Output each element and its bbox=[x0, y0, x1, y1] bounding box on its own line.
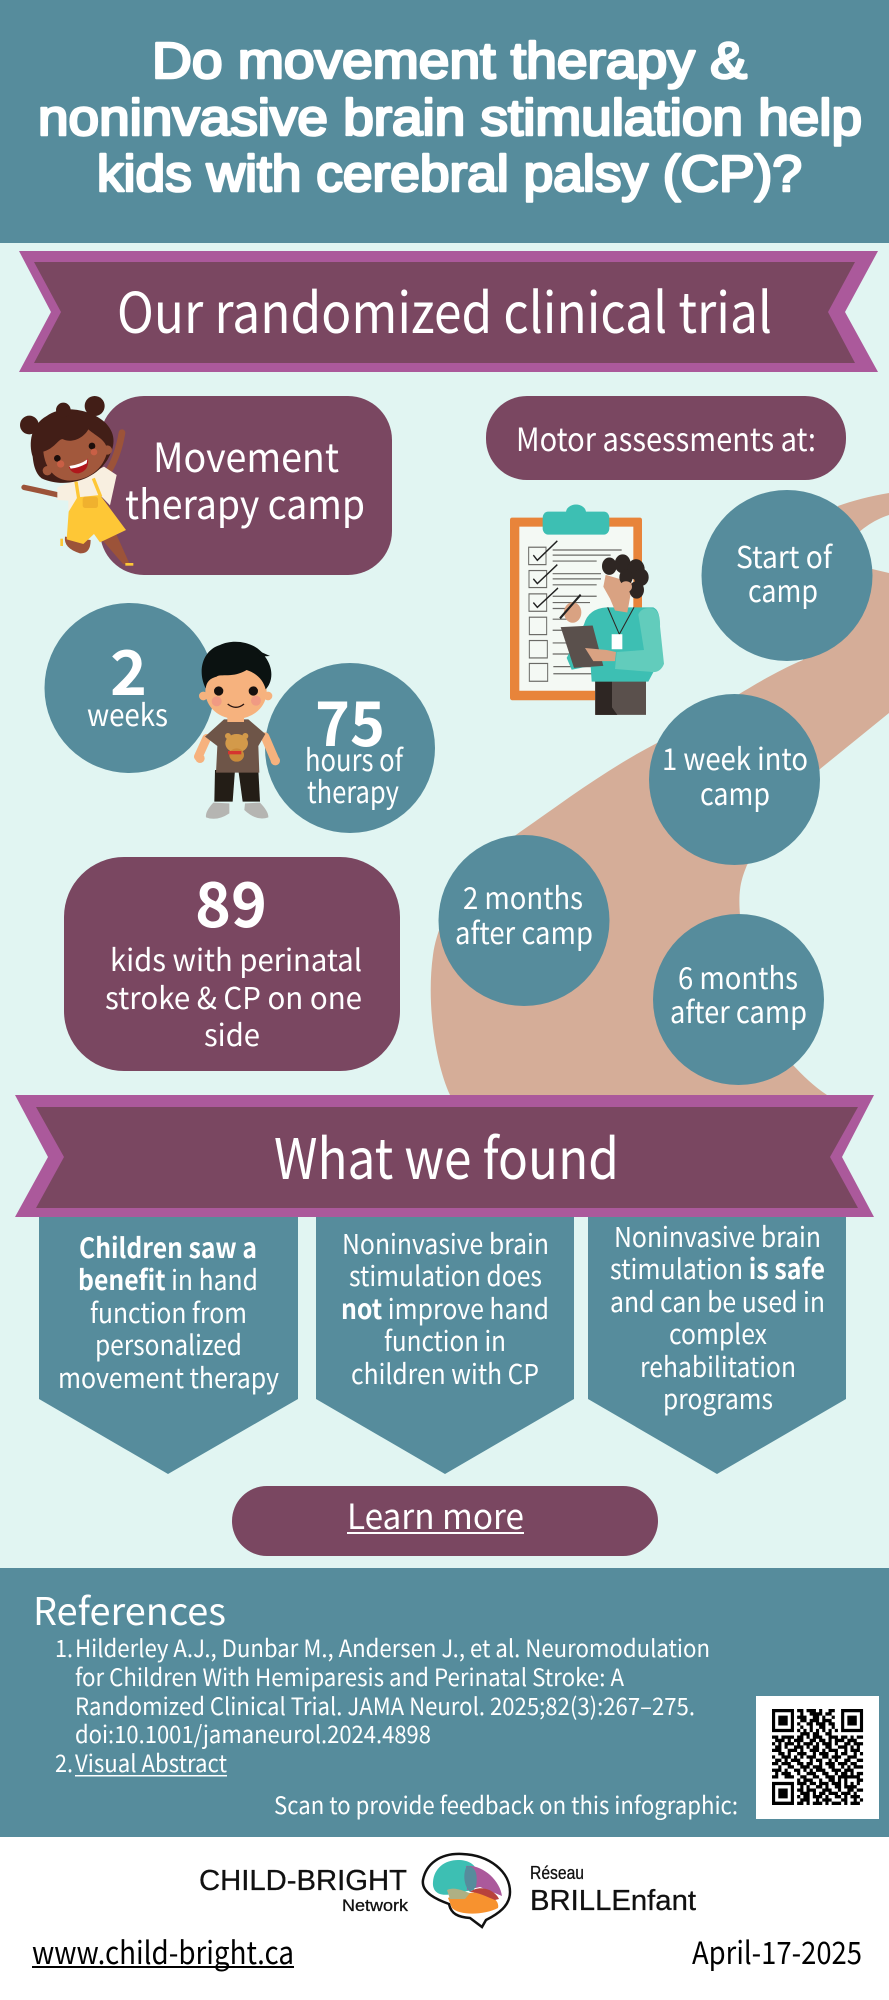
header band with title: Do movement therapy & bbox=[152, 32, 747, 89]
section ribbon: our randomized clinical trial bbox=[19, 251, 878, 372]
icon: clinician with clipboard bbox=[510, 505, 664, 715]
panel: 89 kids bbox=[64, 855, 400, 1071]
finding card: safe: rehabilitation bbox=[640, 1345, 796, 1385]
stat circle: 75 hours of therapy: therapy bbox=[307, 768, 399, 812]
finding card: safe: complex bbox=[669, 1312, 767, 1352]
assessment circle: 6 months after camp bbox=[653, 914, 824, 1085]
finding card: benefit: personalized bbox=[95, 1323, 242, 1363]
winding path behind assessment circles bbox=[431, 493, 889, 1095]
date: April-17-2025 bbox=[692, 1928, 862, 1973]
panel: movement therapy camp: Movement bbox=[153, 426, 339, 484]
assessment circle: start of camp: camp bbox=[748, 567, 818, 611]
panel: references: for Children With Hemiparesis and Perinatal Stroke: A bbox=[75, 1658, 624, 1693]
panel: 89 kids: 89 bbox=[195, 855, 267, 945]
panel: motor assessments heading: Motor assessments at: bbox=[516, 415, 816, 461]
header band with title bbox=[0, 0, 889, 243]
finding card: no improvement: children with CP bbox=[351, 1352, 539, 1392]
logo: Réseau BRILLEnfant: Réseau bbox=[530, 1863, 584, 1883]
logo: CHILD-BRIGHT Network: Network bbox=[342, 1896, 409, 1915]
header band with title: kids with cerebral palsy (CP)? bbox=[97, 145, 802, 202]
stat circle: 75 hours of therapy: 75 bbox=[315, 674, 385, 764]
finding card: benefit: movement therapy bbox=[58, 1356, 279, 1396]
finding card: benefit: Children saw a bbox=[79, 1226, 257, 1266]
icon: standing boy bbox=[195, 642, 280, 819]
finding card: safe bbox=[588, 1210, 846, 1474]
panel: references: Hilderley A.J., Dunbar M., Andersen J., et al. Neuromodulation bbox=[75, 1629, 710, 1664]
button: learn more: Learn more bbox=[347, 1489, 524, 1540]
panel: references: doi:10.1001/jamaneurol.2024.4898 bbox=[75, 1715, 431, 1750]
panel: references: 1. bbox=[55, 1629, 73, 1664]
section ribbon: our randomized clinical trial: Our randomized clinical trial bbox=[117, 269, 772, 350]
assessment circle: 6 months after camp: 6 months bbox=[678, 954, 798, 998]
section ribbon: what we found bbox=[15, 1095, 874, 1217]
panel: 89 kids: stroke & CP on one bbox=[105, 974, 362, 1018]
finding card: no improvement: function in bbox=[384, 1319, 506, 1359]
finding card: benefit: function from bbox=[90, 1291, 247, 1331]
website link: www.child-bright.ca bbox=[32, 1928, 294, 1973]
panel: references: References bbox=[33, 1581, 226, 1636]
assessment circle: 2 months after camp: 2 months bbox=[463, 874, 583, 918]
logo: CHILD-BRIGHT Network: CHILD-BRIGHT bbox=[199, 1865, 407, 1897]
panel: references: Randomized Clinical Trial. JAMA Neurol. 2025;82(3):267–275. bbox=[75, 1687, 695, 1722]
icon: QR code bbox=[756, 1696, 879, 1819]
panel: references: Visual Abstract bbox=[75, 1744, 227, 1779]
assessment circle: 1 week into camp: 1 week into bbox=[662, 735, 808, 779]
finding card: no improvement: not improve hand bbox=[341, 1287, 549, 1327]
stat circle: 2 weeks bbox=[44, 603, 214, 773]
finding card: benefit: benefit in hand bbox=[78, 1258, 258, 1298]
finding card: no improvement: stimulation does bbox=[349, 1254, 542, 1294]
assessment circle: 1 week into camp bbox=[649, 694, 820, 865]
finding card: safe: Noninvasive brain bbox=[614, 1215, 821, 1255]
finding card: safe: stimulation is safe bbox=[610, 1247, 825, 1287]
finding card: no improvement bbox=[316, 1210, 574, 1474]
button: learn more bbox=[232, 1486, 658, 1556]
icon: jumping girl bbox=[20, 396, 133, 566]
logo: Réseau BRILLEnfant: BRILLEnfant bbox=[530, 1885, 696, 1917]
panel: movement therapy camp: therapy camp bbox=[125, 473, 365, 531]
assessment circle: start of camp: Start of bbox=[736, 533, 833, 577]
stat circle: 2 weeks: weeks bbox=[87, 691, 168, 735]
assessment circle: 2 months after camp: after camp bbox=[455, 909, 593, 953]
icon: brain speech bubble logo bbox=[423, 1854, 510, 1927]
finding card: no improvement: Noninvasive brain bbox=[342, 1222, 549, 1262]
assessment circle: 6 months after camp: after camp bbox=[670, 988, 807, 1032]
stat circle: 2 weeks: 2 bbox=[110, 623, 147, 713]
panel: 89 kids: side bbox=[204, 1011, 260, 1055]
panel: 89 kids: kids with perinatal bbox=[110, 936, 362, 980]
panel: references bbox=[0, 1568, 889, 1837]
assessment circle: 2 months after camp bbox=[438, 835, 610, 1006]
stat circle: 75 hours of therapy bbox=[265, 663, 435, 833]
panel: references: Scan to provide feedback on this infographic: bbox=[274, 1786, 738, 1821]
assessment circle: 1 week into camp: camp bbox=[700, 770, 770, 814]
logo: Réseau BRILLEnfant bbox=[530, 1863, 696, 1917]
panel: references: 2. bbox=[55, 1744, 73, 1779]
header band with title: noninvasive brain stimulation help bbox=[38, 89, 862, 146]
finding card: benefit bbox=[39, 1210, 298, 1474]
panel: motor assessments heading bbox=[486, 396, 846, 480]
finding card: safe: and can be used in bbox=[610, 1280, 825, 1320]
footer background bbox=[0, 1837, 889, 2000]
assessment circle: start of camp bbox=[702, 490, 872, 661]
section ribbon: what we found: What we found bbox=[274, 1115, 619, 1196]
logo: CHILD-BRIGHT Network bbox=[199, 1865, 409, 1915]
panel: movement therapy camp bbox=[100, 396, 392, 575]
stat circle: 75 hours of therapy: hours of bbox=[305, 736, 404, 780]
finding card: safe: programs bbox=[663, 1377, 773, 1417]
